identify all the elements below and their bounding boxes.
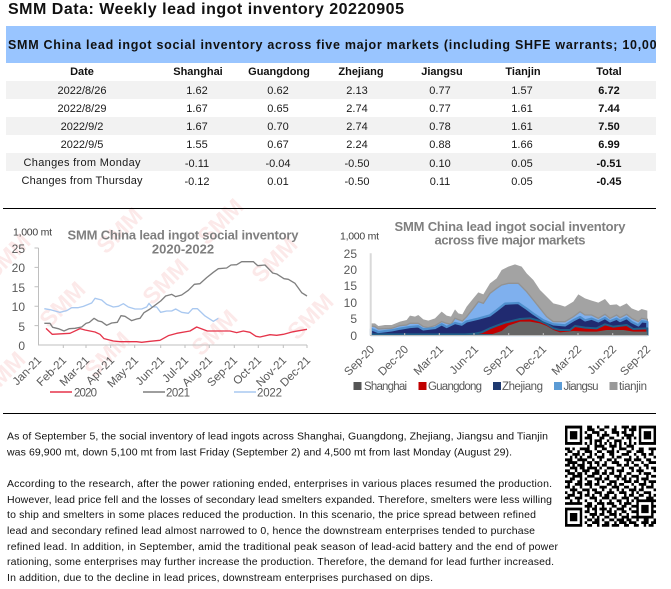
y axis labels: 25	[12, 242, 25, 256]
row changes from Thursday: Changes from Thursday	[22, 175, 143, 187]
watermarks: SMM	[34, 276, 91, 333]
chart: five markets stacked area	[340, 219, 653, 393]
y axis labels: 20	[344, 263, 357, 277]
text block: second paragraph: refined lead. In addition, in September, amid the traditional peak season of lead-acid battery and the end of power	[7, 541, 558, 553]
chart title: SMM China lead ingot social inventory	[68, 228, 299, 242]
row 2022/9/5: 1.66	[511, 139, 533, 151]
x axis labels: Dec-20	[376, 344, 411, 378]
text block: first paragraph: was 69,900 mt, down 5,100 mt from last Friday (September 2) and 4,500 mt from last Monday (August 29).	[6, 446, 512, 458]
watermarks	[0, 193, 339, 403]
row changes from Monday: -0.51	[596, 158, 622, 170]
row changes from Thursday	[22, 175, 622, 188]
legend: Guangdong	[428, 381, 482, 393]
x axis labels	[342, 344, 653, 378]
x axis labels: May-21	[106, 355, 141, 390]
row changes from Monday	[24, 157, 622, 170]
row 2022/9/2: 1.61	[511, 121, 533, 133]
x axis labels: Jun-21	[134, 355, 167, 388]
y axis labels: 5	[350, 312, 357, 326]
line series 2022	[44, 298, 218, 321]
legend: 2020	[74, 388, 97, 400]
row 2022/9/2: 0.78	[429, 121, 451, 133]
x axis labels: Jan-21	[11, 355, 44, 388]
row changes from Monday: -0.11	[185, 158, 209, 170]
row 2022/8/26: 6.72	[598, 85, 620, 97]
stacked areas	[371, 264, 647, 335]
text block: first paragraph	[6, 430, 548, 458]
y axis labels: 10	[12, 300, 25, 314]
row 2022/8/26	[58, 85, 620, 97]
row 2022/9/5: 6.99	[598, 139, 620, 151]
row 2022/8/29: 1.61	[511, 103, 533, 115]
line series 2021	[44, 262, 307, 331]
x axis labels: Sep-21	[205, 355, 240, 389]
text block: second paragraph: In addition, due to the decline in lead prices, downstream enterprises purchased on dips.	[7, 572, 433, 584]
x axis labels: Dec-21	[278, 355, 313, 389]
x axis labels: Nov-21	[254, 355, 289, 389]
y axis labels: 20	[12, 261, 25, 275]
chart: inventory 2020-2022 line chart: 2020-2022	[152, 242, 214, 256]
row 2022/9/2: 2022/9/2	[61, 121, 103, 133]
row 2022/8/26: 0.77	[429, 85, 451, 97]
watermarks: SMM	[79, 326, 136, 383]
x axis labels: Mar-22	[550, 344, 584, 378]
row changes from Monday: Changes from Monday	[24, 157, 141, 169]
x axis labels: Mar-21	[412, 344, 446, 378]
row 2022/8/26: 1.57	[511, 85, 533, 97]
text block: second paragraph: rationing, some enterprises may further increase the production. Therefore, the demand for lead further increased.	[7, 556, 554, 568]
row 2022/8/26: 0.62	[267, 85, 289, 97]
x axis labels: Sep-20	[342, 344, 377, 378]
legend: 2022	[257, 388, 282, 400]
x axis labels: Jun-22	[586, 344, 619, 377]
table banner	[6, 26, 671, 63]
x axis labels: Jul-21	[160, 355, 191, 385]
y unit: 1,000 mt	[13, 226, 52, 238]
legend: Zhejiang	[502, 381, 543, 393]
table banner: SMM China lead ingot social inventory across five major markets (including SHFE warrants; 10,000 mt)	[8, 38, 671, 52]
x axis labels: Apr-21	[84, 355, 117, 388]
text block: first paragraph: As of September 5, the social inventory of lead ingots across Shanghai, Guangdong, Zhejiang, Jiangsu and Tianjin	[7, 430, 548, 442]
watermarks: SMM	[192, 193, 249, 250]
row 2022/9/2: 2.74	[346, 121, 368, 133]
legend: 2021	[166, 388, 190, 400]
y axis labels: 0	[350, 329, 357, 343]
text block: second paragraph	[7, 478, 558, 584]
text block: second paragraph: However, lead price fell and the losses of secondary lead smelters expanded. Therefore, smelters were less willing	[7, 494, 552, 506]
table header row: Jiangsu	[421, 66, 463, 78]
y axis labels: 25	[344, 247, 357, 261]
y axis labels: 10	[344, 296, 357, 310]
y axis labels: 0	[18, 339, 25, 353]
row 2022/9/5	[61, 139, 620, 151]
row 2022/8/26: 2.13	[346, 85, 368, 97]
row 2022/8/29	[58, 103, 621, 115]
row changes from Thursday: 0.01	[267, 176, 289, 188]
x axis labels: Oct-21	[231, 355, 264, 388]
area: guangdong	[371, 318, 647, 335]
chart title: SMM China lead ingot social inventory	[394, 219, 626, 234]
line series 2020	[46, 327, 307, 342]
x axis labels: Dec-21	[514, 344, 549, 378]
axes	[370, 253, 372, 336]
row changes from Monday: -0.04	[265, 158, 291, 170]
row changes from Monday: 0.10	[429, 158, 451, 170]
icon: QR code	[565, 427, 656, 525]
x axis labels: Feb-21	[35, 355, 69, 389]
row 2022/9/2: 1.67	[186, 121, 208, 133]
x axis labels: Sep-22	[618, 344, 653, 378]
table header row: Shanghai	[173, 66, 223, 78]
table header row: Total	[596, 66, 622, 78]
x axis labels: Jun-21	[448, 344, 481, 377]
y axis labels	[344, 247, 357, 343]
watermarks: SMM	[186, 304, 243, 361]
legend: Jiangsu	[564, 381, 598, 393]
row 2022/8/29: 7.44	[598, 103, 621, 115]
x axis labels	[11, 355, 313, 390]
text block: second paragraph: to ship and smelters in some places reduced the production. In this scenario, the price spread between refined	[7, 509, 536, 521]
row changes from Thursday: -0.45	[596, 176, 622, 188]
area: shanghai	[465, 322, 647, 335]
x axis labels: Mar-21	[58, 355, 92, 389]
row 2022/9/5: 1.55	[186, 139, 208, 151]
row 2022/8/29: 0.65	[267, 103, 289, 115]
row changes from Thursday: -0.12	[184, 176, 210, 188]
panel: inventory table	[6, 26, 671, 188]
chart: five markets stacked area: across five major markets	[434, 232, 586, 248]
text block: second paragraph: According to the research, after the power rationing ended, enterprises in various places resumed the production.	[7, 478, 552, 490]
area: jiangsu	[371, 283, 647, 335]
row 2022/8/29: 0.77	[429, 103, 451, 115]
row changes from Thursday: -0.50	[344, 176, 370, 188]
row changes from Thursday: 0.05	[511, 176, 533, 188]
row 2022/9/5: 0.88	[429, 139, 451, 151]
row changes from Monday: -0.50	[344, 158, 370, 170]
table header row: Guangdong	[248, 66, 310, 78]
watermarks: SMM	[246, 231, 303, 288]
table header row	[70, 66, 622, 78]
y axis labels: 5	[18, 320, 25, 334]
text block: second paragraph: lead and secondary refined lead almost narrowed to 0, hence the downstream enterprises tended to purchase	[7, 525, 535, 537]
area: zhejiang	[371, 303, 647, 335]
row 2022/9/2: 7.50	[598, 121, 620, 133]
row 2022/9/5: 0.67	[267, 139, 289, 151]
y axis labels: 15	[344, 279, 357, 293]
watermarks: SMM	[91, 202, 148, 259]
table header row: Tianjin	[505, 66, 541, 78]
area: tianjin	[371, 264, 647, 335]
legend	[50, 388, 282, 400]
y axis labels: 15	[12, 281, 25, 295]
watermarks: SMM	[137, 253, 194, 310]
row changes from Thursday: 0.11	[430, 176, 450, 188]
row 2022/9/2: 0.70	[267, 121, 289, 133]
table header row: Date	[70, 66, 94, 78]
row 2022/8/26: 2022/8/26	[58, 85, 106, 97]
axes	[34, 248, 307, 348]
table header row: Zhejiang	[338, 66, 384, 78]
y unit: 1,000 mt	[340, 230, 379, 242]
row changes from Monday: 0.05	[511, 158, 533, 170]
row 2022/8/29: 1.67	[186, 103, 208, 115]
title: SMM Data: Weekly lead ingot inventory 20220905	[8, 1, 404, 18]
legend: tianjin	[619, 381, 647, 393]
y axis labels	[12, 242, 25, 353]
row 2022/9/2	[61, 121, 620, 133]
x axis labels: Sep-21	[481, 344, 516, 378]
watermarks: SMM	[282, 288, 339, 345]
chart: inventory 2020-2022 line chart	[0, 193, 339, 403]
x axis labels: Aug-21	[180, 355, 215, 389]
legend	[354, 381, 647, 393]
legend: Shanghai	[364, 381, 407, 393]
row 2022/8/29: 2022/8/29	[58, 103, 106, 115]
row 2022/9/5: 2.24	[346, 139, 368, 151]
row 2022/9/5: 2022/9/5	[61, 139, 103, 151]
row 2022/8/29: 2.74	[346, 103, 368, 115]
row 2022/8/26: 1.62	[186, 85, 208, 97]
